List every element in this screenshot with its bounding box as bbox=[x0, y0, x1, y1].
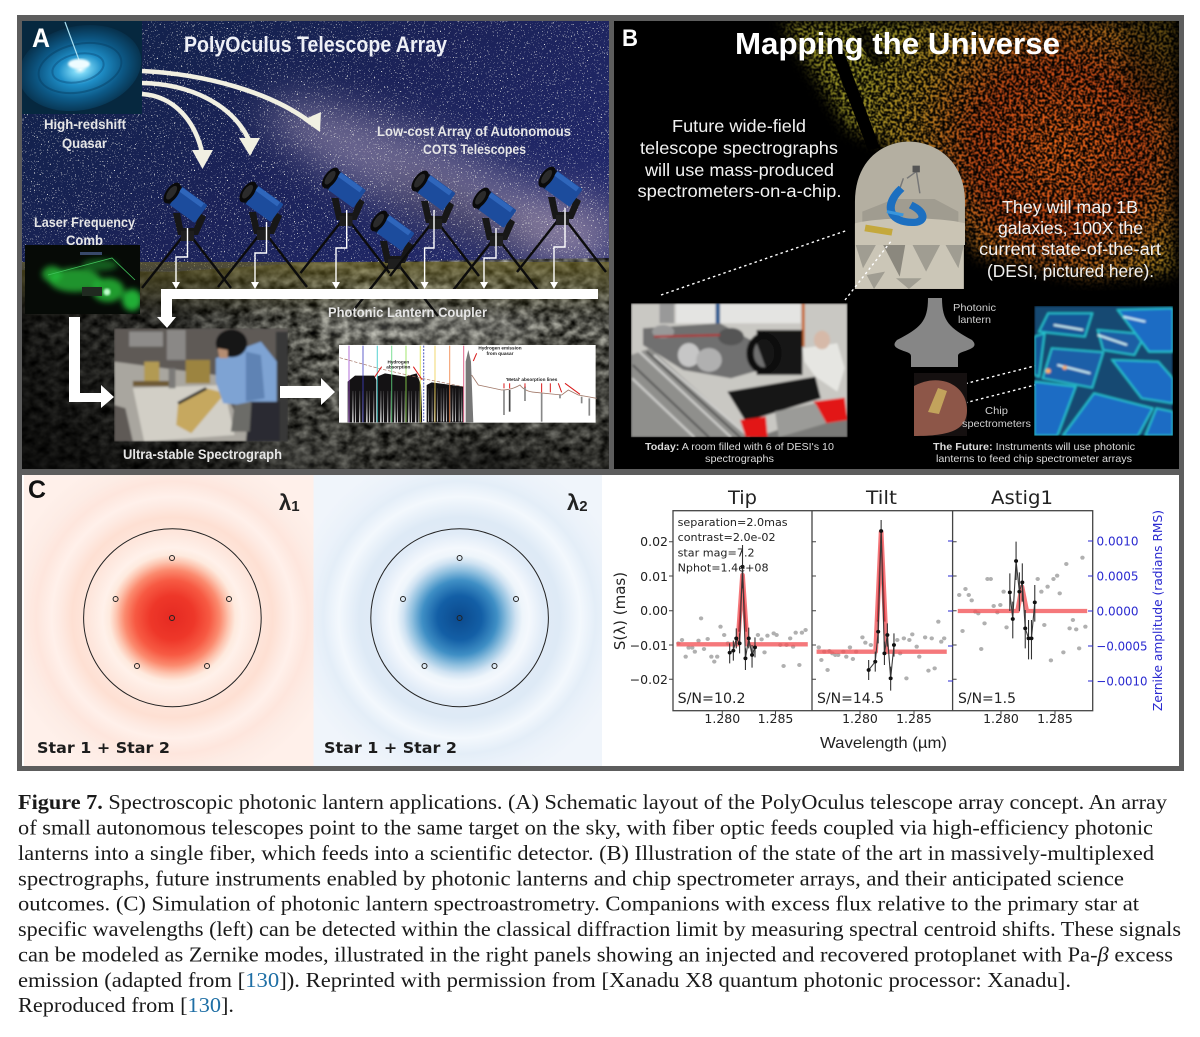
telescope 1 bbox=[142, 180, 231, 288]
shrub ground bbox=[22, 258, 609, 476]
telescope 6 bbox=[451, 185, 540, 293]
spectrum labels bbox=[386, 346, 558, 382]
gray points bbox=[676, 556, 1088, 680]
right axis title: Zernike amplitude (radians RMS) bbox=[1151, 510, 1165, 711]
axes frames bbox=[673, 511, 1093, 711]
lantern label: lantern bbox=[958, 314, 991, 326]
quasar label bbox=[44, 117, 126, 151]
panel titles: Astig1 bbox=[991, 487, 1053, 509]
laser comb label: Laser Frequency bbox=[34, 215, 135, 230]
figure caption bbox=[18, 790, 1181, 1017]
figure caption: spectrographs, future instruments enabled by photonic lanterns and chip spectrometer arrays, and their anticipated science bbox=[18, 866, 1124, 890]
figure caption: emission (adapted from [ 130]). Reprinted with permission from [Xanadu X8 quantum photonic processor: Xanadu]. bbox=[18, 968, 1071, 992]
laser comb label bbox=[34, 218, 135, 245]
x axis labels: 1.280 bbox=[983, 711, 1019, 726]
right axis labels: −0.0005 bbox=[1096, 638, 1148, 654]
label A: A bbox=[32, 23, 50, 53]
panel title: Mapping the Universe bbox=[735, 26, 1060, 61]
simulation parameters bbox=[678, 516, 788, 575]
left axis labels: −0.01 bbox=[630, 638, 668, 653]
black data with error bars bbox=[730, 531, 1035, 678]
signal to noise labels: S/N=1.5 bbox=[958, 691, 1016, 707]
star label 1: Star 1 + Star 2 bbox=[37, 739, 170, 757]
photo: chip spectrometer array bbox=[1034, 306, 1173, 436]
x axis labels: 1.285 bbox=[896, 711, 932, 726]
telescope 4 bbox=[349, 208, 438, 316]
x axis labels bbox=[704, 711, 1073, 726]
coupler arrow bar bbox=[157, 289, 598, 328]
quasar label: Quasar bbox=[62, 136, 108, 151]
figure caption: of small autonomous telescopes point to the same target on the sky, with fiber optic feeds coupled via high-efficiency photonic bbox=[18, 816, 1153, 840]
lantern label bbox=[953, 302, 996, 326]
left text block: Future wide-field bbox=[672, 116, 806, 136]
spectrograph label: Ultra-stable Spectrograph bbox=[123, 447, 282, 462]
red fits bbox=[677, 532, 1087, 652]
photo caption: today: Today: A room filled with 6 of DESI's 10 bbox=[645, 441, 834, 453]
panel titles: Tilt bbox=[865, 487, 897, 509]
simulation parameters: star mag=7.2 bbox=[678, 547, 755, 560]
photo caption: today bbox=[645, 441, 834, 465]
photo caption: today: spectrographs bbox=[705, 453, 774, 465]
chip label bbox=[962, 405, 1031, 430]
photo: chip on fingertip bbox=[914, 373, 967, 436]
wavelength label λ2: 2 bbox=[579, 498, 588, 515]
panel titles bbox=[727, 487, 1053, 509]
blue telescope inside dome bbox=[887, 166, 922, 222]
photo caption: future: The Future: Instruments will use photonic bbox=[933, 441, 1135, 453]
night sky bbox=[22, 21, 609, 281]
tick marks bbox=[669, 541, 1093, 715]
x axis labels: 1.280 bbox=[842, 711, 878, 726]
simulation parameters: Nphot=1.4e+08 bbox=[678, 562, 769, 575]
right text block: (DESI, pictured here). bbox=[987, 261, 1154, 281]
x axis labels: 1.280 bbox=[704, 711, 740, 726]
spectrum labels: 'Metal' absorption lines bbox=[506, 377, 558, 382]
telescopes label bbox=[377, 124, 571, 157]
coupler label: Photonic Lantern Coupler bbox=[328, 305, 488, 320]
figure caption: specific wavelengths (left) can be detected within the classical diffraction limit by measuring spectral centroid shifts. These signals bbox=[18, 917, 1181, 941]
icon: photonic lantern bbox=[894, 298, 974, 367]
galaxy map bbox=[782, 22, 1173, 278]
quasar label: High-redshift bbox=[44, 117, 126, 132]
telescope 2 bbox=[218, 179, 307, 287]
figure caption: lanterns into a single fiber, which feeds into a scientific detector. (B) Illustration of the state of the art in massively-multiplexed bbox=[18, 841, 1154, 865]
right axis labels: −0.0010 bbox=[1096, 674, 1148, 688]
panel A: PolyOculus telescope array bbox=[11, 14, 629, 476]
spectrum labels: from quasar bbox=[487, 351, 514, 356]
figure caption: outcomes. (C) Simulation of photonic lantern spectroastrometry. Companions with excess flux relative to the primary star at bbox=[18, 892, 1139, 916]
telescopes label: Low-cost Array of Autonomous bbox=[377, 124, 571, 139]
right axis labels: 0.0010 bbox=[1096, 534, 1139, 548]
spectrum chart bbox=[339, 345, 597, 423]
x axis labels: 1.285 bbox=[1037, 711, 1073, 726]
right text block bbox=[979, 197, 1161, 281]
chip label: spectrometers bbox=[962, 418, 1031, 430]
absorption forest bbox=[345, 350, 473, 422]
arrow to spectrum bbox=[280, 378, 335, 405]
panel title: PolyOculus Telescope Array bbox=[184, 32, 448, 57]
panel titles: Tip bbox=[727, 487, 757, 509]
y axis title: S(λ) (mas) bbox=[611, 572, 629, 650]
panel C: spectroastrometry bbox=[22, 475, 1179, 766]
dotted callout lines to dome bbox=[661, 230, 1050, 407]
label C: C bbox=[28, 476, 46, 504]
spectrograph photo bbox=[114, 328, 288, 442]
right text block: galaxies, 100X the bbox=[998, 218, 1143, 238]
red annotation arrows bbox=[375, 353, 580, 394]
signal to noise labels: S/N=10.2 bbox=[678, 691, 746, 707]
x axis title: Wavelength (µm) bbox=[820, 735, 947, 752]
laser comb label: Comb bbox=[66, 233, 103, 248]
chart data in plot coordinates bbox=[676, 520, 1088, 691]
photo: DESI spectrographs room bbox=[631, 303, 848, 437]
right text block: current state-of-the-art bbox=[979, 239, 1161, 259]
hydrogen marker lines bbox=[349, 346, 464, 422]
figure caption: Figure 7. Spectroscopic photonic lantern applications. (A) Schematic layout of the PolyOculus telescope array concept. An array bbox=[18, 790, 1167, 814]
right text block: They will map 1B bbox=[1002, 197, 1138, 217]
telescope 5 bbox=[390, 168, 479, 276]
red heatmap λ1 bbox=[24, 475, 314, 766]
wavelength label λ1: λ bbox=[279, 490, 291, 515]
chip label: Chip bbox=[985, 405, 1008, 417]
star field bbox=[22, 21, 609, 276]
telescope dome bbox=[855, 142, 965, 289]
spectrum labels: Hydrogen emission bbox=[478, 346, 522, 351]
right axis labels bbox=[1096, 534, 1148, 688]
simulation parameters: separation=2.0mas bbox=[678, 516, 788, 529]
lantern label: Photonic bbox=[953, 302, 996, 314]
photo caption: future bbox=[933, 441, 1135, 465]
telescope 7 bbox=[517, 164, 606, 272]
left text block: spectrometers-on-a-chip. bbox=[638, 181, 842, 201]
figure caption: can be modeled as Zernike modes, illustrated in the right panels showing an injected and recovered protoplanet with Pa- β excess bbox=[18, 942, 1173, 966]
signal to noise labels bbox=[678, 691, 1016, 707]
telescopes label: COTS Telescopes bbox=[423, 142, 526, 157]
fiber feeds bbox=[172, 208, 565, 289]
figure caption: Reproduced from [ 130]. bbox=[18, 993, 234, 1017]
milky way bbox=[251, 78, 609, 262]
left axis labels: 0.02 bbox=[640, 534, 668, 549]
right axis labels: 0.0005 bbox=[1096, 568, 1138, 584]
arrows from quasar to telescopes bbox=[142, 71, 321, 169]
arrow from laser to spectrograph bbox=[69, 317, 114, 408]
telescope 3 bbox=[300, 165, 390, 273]
signal to noise labels: S/N=14.5 bbox=[817, 691, 884, 707]
left text block bbox=[638, 116, 842, 201]
simulation parameters: contrast=2.0e-02 bbox=[678, 531, 776, 544]
blue heatmap λ2 bbox=[314, 475, 602, 766]
left axis labels: 0.01 bbox=[640, 569, 668, 584]
wavelength label λ1: 1 bbox=[291, 498, 300, 515]
figure frame bbox=[17, 15, 1184, 771]
right axis labels: 0.0000 bbox=[1096, 604, 1139, 618]
continuum curve bbox=[340, 358, 463, 387]
chart: Zernike signals bbox=[611, 487, 1165, 752]
panel B: mapping the universe bbox=[614, 21, 1179, 469]
left axis labels: 0.00 bbox=[640, 603, 668, 618]
star label 2: Star 1 + Star 2 bbox=[324, 739, 457, 757]
spectrum labels: absorption bbox=[386, 364, 411, 369]
laser comb photo bbox=[25, 245, 142, 314]
photo caption: future: lanterns to feed chip spectrometer arrays bbox=[936, 453, 1132, 465]
icon: quasar image bbox=[22, 21, 142, 114]
left text block: telescope spectrographs bbox=[640, 138, 838, 158]
spectrum labels: Hydrogen bbox=[387, 359, 409, 364]
label B: B bbox=[622, 25, 638, 52]
left text block: will use mass-produced bbox=[644, 160, 834, 180]
left axis labels: −0.02 bbox=[630, 672, 668, 687]
x axis labels: 1.285 bbox=[758, 711, 793, 726]
left axis labels bbox=[630, 534, 668, 687]
wavelength label λ2: λ bbox=[567, 490, 579, 515]
metal absorption lines bbox=[504, 387, 589, 422]
